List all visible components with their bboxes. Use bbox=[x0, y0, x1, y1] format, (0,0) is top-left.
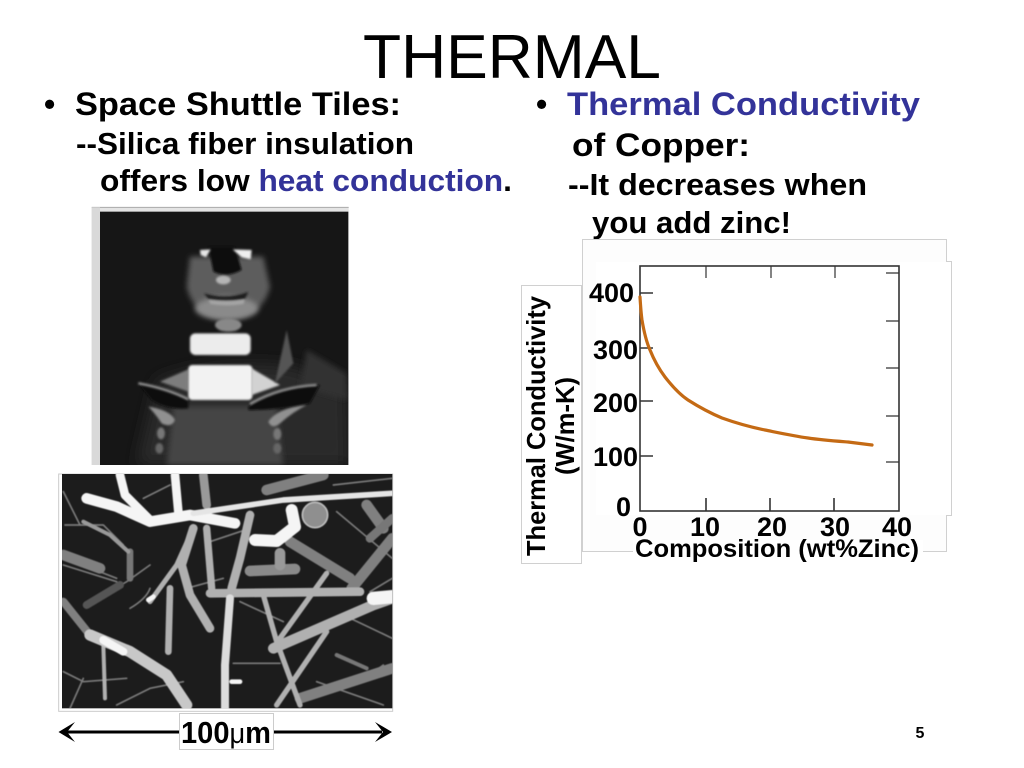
y axis title bbox=[521, 295, 580, 556]
title: THERMAL bbox=[363, 23, 661, 92]
page number: 5 bbox=[916, 725, 925, 742]
right text block: thermal conductivity of copper: of Copper: bbox=[572, 127, 750, 163]
shuttle tile pieces bbox=[188, 333, 252, 400]
plot axes and ticks bbox=[640, 266, 899, 511]
y axis tick labels: 100 bbox=[593, 442, 638, 472]
y axis tick labels: 400 bbox=[589, 278, 634, 308]
right text block: thermal conductivity of copper bbox=[536, 86, 920, 240]
y axis title: Thermal Conductivity bbox=[521, 295, 551, 556]
y axis tick labels: 200 bbox=[593, 388, 638, 418]
x axis tick labels: 10 bbox=[690, 512, 720, 542]
photo: man holding shuttle tile bbox=[92, 207, 349, 465]
left text block: space shuttle tiles: --Silica fiber insulation bbox=[76, 126, 414, 161]
x axis title: Composition (wt%Zinc) bbox=[635, 535, 919, 563]
y axis tick labels: 300 bbox=[593, 335, 638, 365]
left text block: space shuttle tiles: offers low heat conduction. bbox=[100, 163, 512, 198]
x axis tick labels: 30 bbox=[820, 512, 850, 542]
right text block: thermal conductivity of copper: --It decreases when bbox=[568, 167, 867, 202]
chart: thermal conductivity vs zinc composition bbox=[521, 240, 952, 564]
arrow: scale span bbox=[58, 722, 392, 742]
left text block: space shuttle tiles: Space Shuttle Tiles: bbox=[75, 86, 401, 122]
curve: conductivity of copper-zinc bbox=[640, 297, 872, 445]
right text block: thermal conductivity of copper: • bbox=[536, 86, 547, 122]
micrograph: silica fibers bbox=[59, 474, 393, 711]
left text block: space shuttle tiles bbox=[44, 86, 512, 198]
x axis tick labels: 0 bbox=[632, 512, 648, 542]
y axis tick labels bbox=[589, 278, 638, 522]
chart background patches bbox=[522, 240, 952, 564]
right text block: thermal conductivity of copper: you add zinc! bbox=[592, 205, 791, 240]
left text block: space shuttle tiles: • bbox=[44, 86, 55, 122]
scale bar: 100 micrometres: 100μm bbox=[181, 715, 271, 750]
scale bar: 100 micrometres bbox=[58, 714, 392, 750]
y axis tick labels: 0 bbox=[616, 492, 631, 522]
x axis tick labels: 40 bbox=[882, 512, 912, 542]
y axis title: (W/m-K) bbox=[550, 377, 580, 475]
x axis tick labels bbox=[632, 512, 912, 542]
right text block: thermal conductivity of copper: Thermal Conductivity bbox=[567, 86, 920, 122]
x axis tick labels: 20 bbox=[757, 512, 787, 542]
